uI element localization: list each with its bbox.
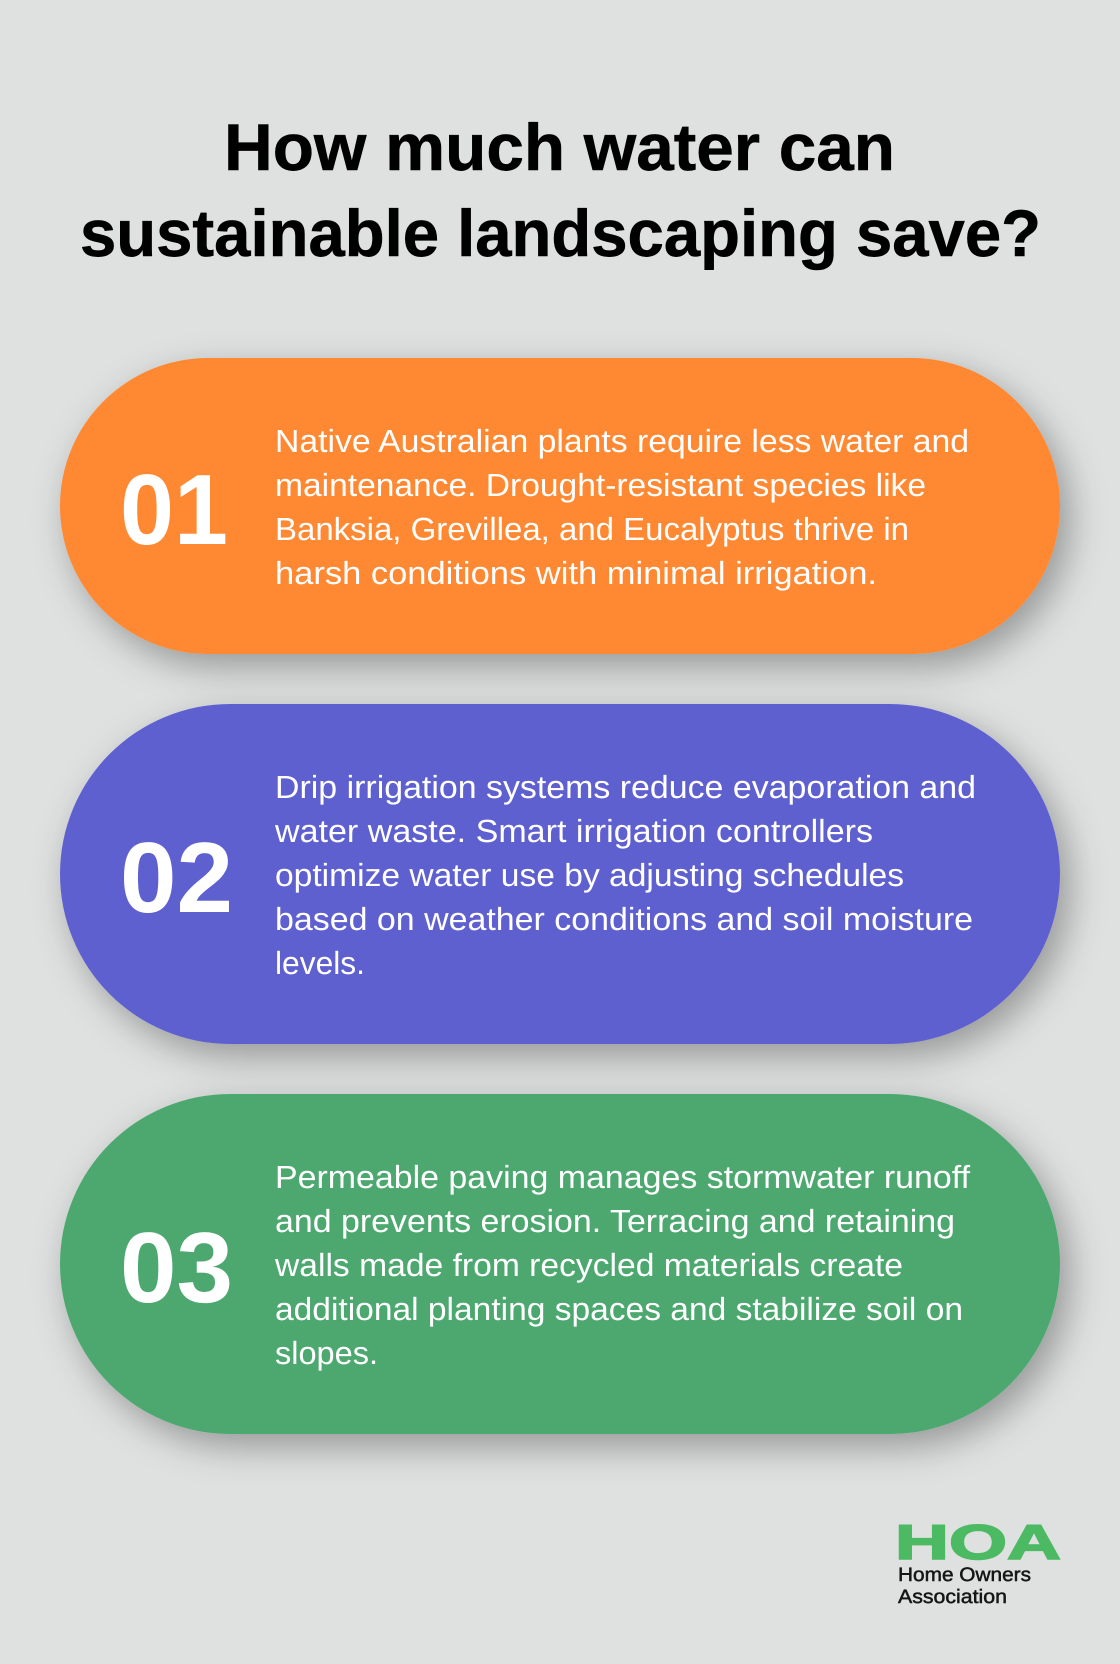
- number 03: 03: [120, 1212, 233, 1324]
- logo: HOA Home Owners Association: Association: [898, 1586, 1007, 1608]
- title: [80, 110, 1041, 270]
- text block: step 03: [274, 1159, 970, 1371]
- text block: step 01: [275, 423, 969, 591]
- title: How much water can: [224, 110, 895, 184]
- number 02: 02: [120, 822, 233, 934]
- text block: step 02: water waste. Smart irrigation controllers: [274, 813, 873, 849]
- logo: HOA Home Owners Association: HOA: [895, 1516, 1061, 1570]
- text block: step 03: and prevents erosion. Terracing and retaining: [275, 1203, 955, 1239]
- text block: step 03: additional planting spaces and stabilize soil on: [275, 1291, 963, 1327]
- text block: step 01: Banksia, Grevillea, and Eucalyptus thrive in: [275, 511, 909, 547]
- text block: step 02: Drip irrigation systems reduce evaporation and: [275, 769, 976, 805]
- panel: step 01 native plants: [60, 358, 1060, 654]
- number 01: 01: [120, 454, 228, 566]
- text block: step 01: maintenance. Drought-resistant species like: [275, 467, 926, 503]
- text block: step 01: harsh conditions with minimal irrigation.: [275, 555, 877, 591]
- panel: step 02 irrigation: [60, 704, 1060, 1044]
- text block: step 03: Permeable paving manages stormwater runoff: [275, 1159, 970, 1195]
- logo: HOA Home Owners Association: Home Owners: [898, 1564, 1031, 1586]
- text block: step 03: walls made from recycled materials create: [274, 1247, 903, 1283]
- text block: step 03: slopes.: [275, 1335, 378, 1371]
- panel: step 03 paving: [60, 1094, 1060, 1434]
- text block: step 02: levels.: [275, 945, 365, 981]
- text block: step 01: Native Australian plants require less water and: [275, 423, 969, 459]
- text block: step 02: [274, 769, 976, 981]
- logo: HOA Home Owners Association: [895, 1516, 1061, 1608]
- text block: step 02: optimize water use by adjusting schedules: [275, 857, 904, 893]
- title: sustainable landscaping save?: [80, 196, 1041, 270]
- text block: step 02: based on weather conditions and soil moisture: [275, 901, 973, 937]
